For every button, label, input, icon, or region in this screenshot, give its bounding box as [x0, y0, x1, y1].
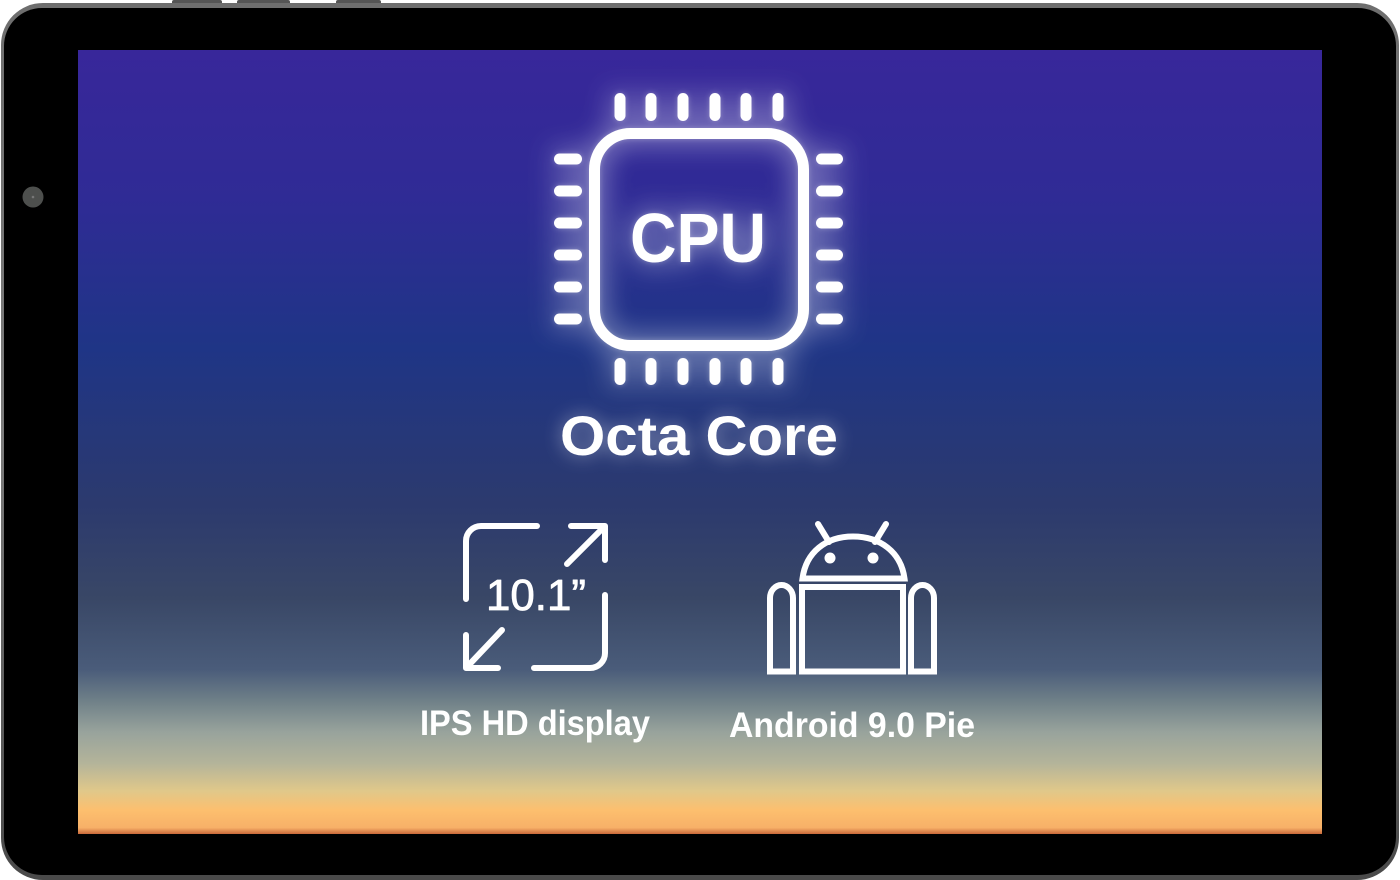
label: Android 9.0 Pie: Android 9.0 Pie: [729, 706, 975, 745]
left pins: [554, 154, 582, 324]
right pins: [816, 154, 843, 324]
right arm: [911, 585, 934, 672]
chip label: CPU: [630, 199, 766, 277]
bottom-right corner: [534, 595, 605, 668]
size label: 10.1”: [486, 571, 586, 620]
top pins: [614, 93, 784, 121]
bottom-left arrow: [466, 630, 502, 668]
top edge buttons: [172, 0, 381, 6]
front camera: [22, 186, 44, 208]
antennae: [818, 524, 886, 542]
icon: Android robot: [770, 524, 934, 672]
heading: Octa Core: Octa Core: [560, 404, 838, 467]
top-left corner: [466, 526, 537, 599]
icon: 10.1 inch display: [466, 526, 605, 668]
chip body outline: [594, 134, 804, 346]
top-right arrow: [567, 526, 605, 564]
head: [802, 536, 904, 578]
bottom pins: [614, 358, 784, 385]
screen background: [78, 50, 1322, 834]
left arm: [770, 585, 793, 672]
eyes: [824, 552, 878, 564]
body: [802, 587, 903, 672]
label: IPS HD display: IPS HD display: [420, 704, 650, 743]
icon: CPU chip: [554, 93, 843, 385]
